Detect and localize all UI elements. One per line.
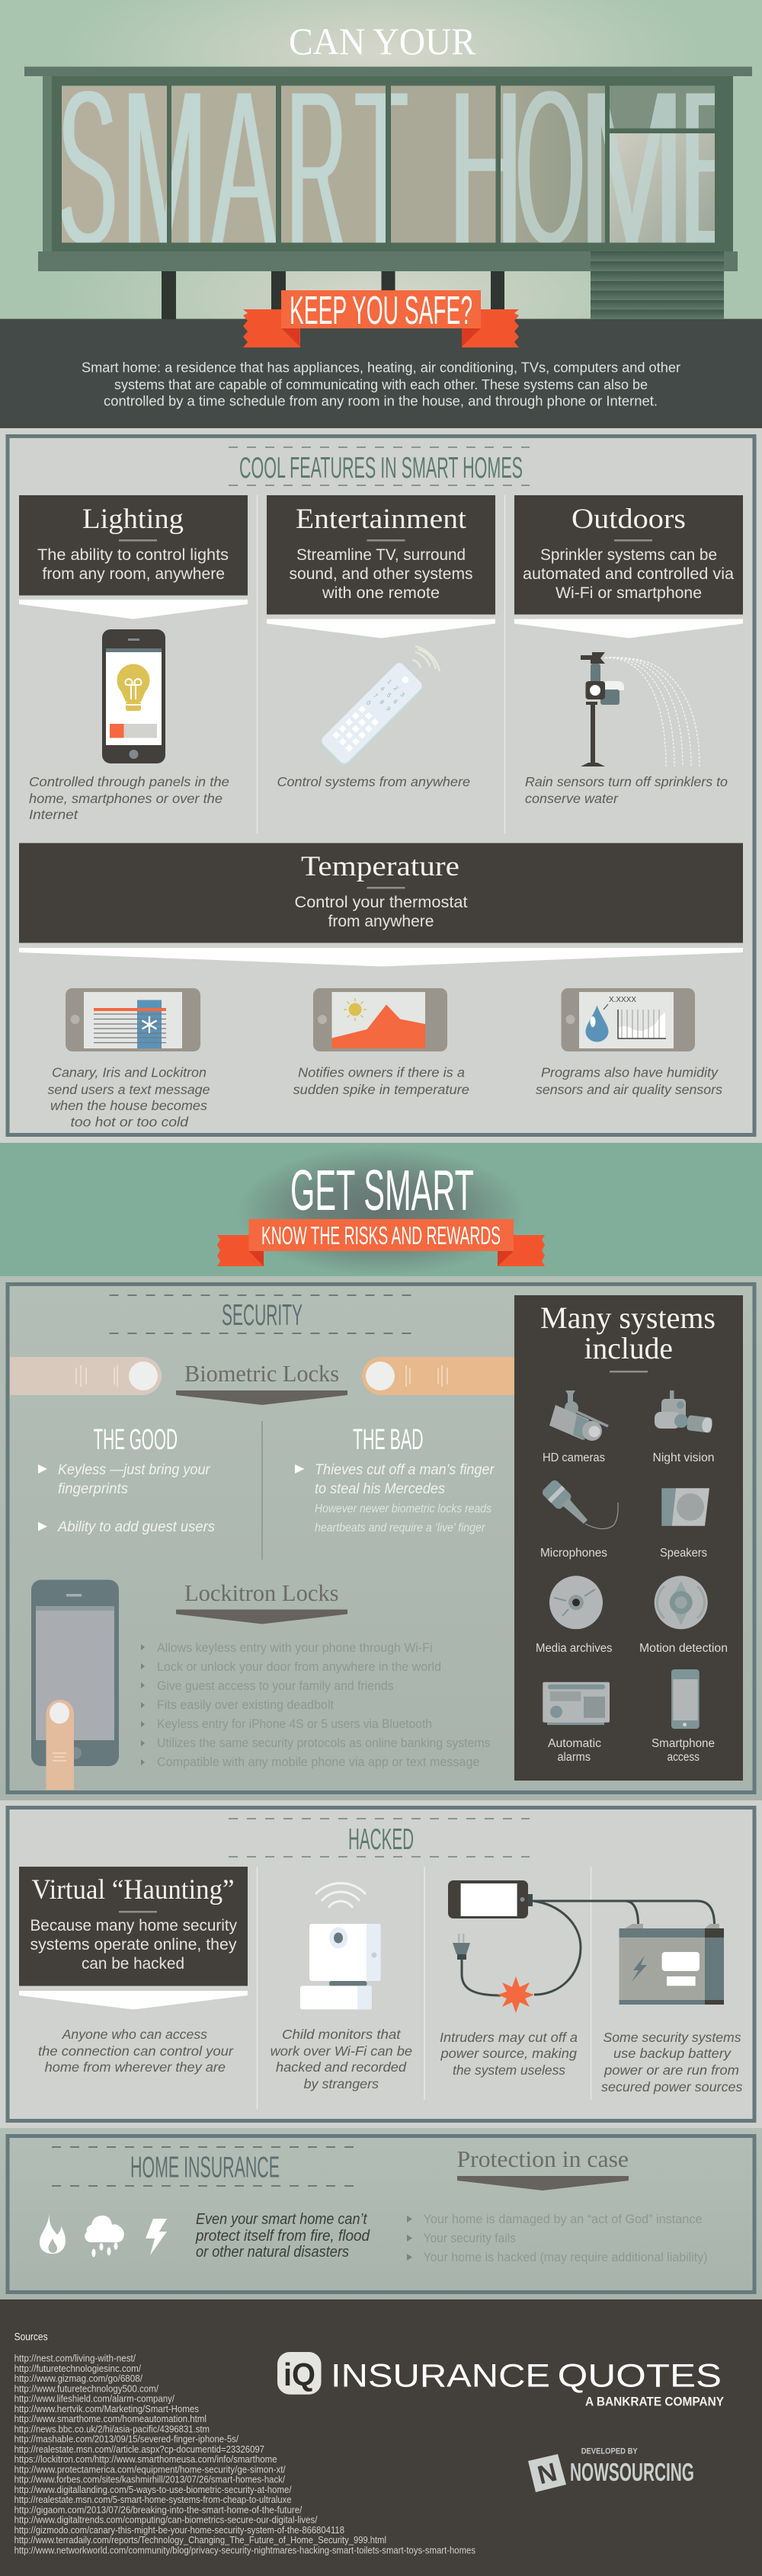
- logo: nowsourcing: DEVELOPED BY: [581, 2447, 638, 2456]
- captions: hacked: home from wherever they are: [45, 2059, 226, 2075]
- footer: [0, 2299, 762, 2576]
- title: smart home in the windows: E: [680, 43, 747, 293]
- icon: remote control: 8: [378, 699, 386, 706]
- label: motion detection: Motion detection: [639, 1642, 728, 1655]
- captions: top row: Rain sensors turn off sprinklers to: [525, 774, 728, 789]
- card: entertainment: Entertainment: [296, 504, 467, 535]
- captions: temperature row: Notifies owners if there is a: [298, 1065, 465, 1080]
- logo: insurance quotes: INSURANCE: [331, 2359, 550, 2395]
- captions: temperature row: [47, 1065, 722, 1129]
- label: smartphone access: [652, 1737, 715, 1764]
- icon: alarm panel: [543, 1682, 610, 1725]
- title: smart home in the windows: A: [212, 43, 276, 294]
- column: the good: Keyless —just bring your: [58, 1462, 210, 1478]
- sources list: http://www.protectamerica.com/equipment/home-security/ge-simon-xt/: [14, 2464, 286, 2475]
- icon: phone with light bulb: [102, 629, 165, 763]
- logo: nowsourcing: [528, 2447, 694, 2492]
- panel: security: [0, 1276, 762, 1800]
- icon: night vision camera: [655, 1390, 713, 1433]
- sources list: http://www.futuretechnology500.com/: [14, 2383, 158, 2394]
- captions: top row: Controlled through panels in the: [29, 774, 229, 789]
- label: smartphone access: access: [668, 1751, 700, 1764]
- captions: hacked: hacked and recorded: [276, 2059, 407, 2075]
- card: entertainment: Streamline TV, surround: [296, 546, 466, 564]
- icon: child monitor: [300, 1883, 380, 2009]
- captions: top row: Internet: [29, 807, 78, 822]
- icon: phone with temperature spike: [313, 988, 447, 1051]
- captions: hacked: secured power sources: [601, 2079, 743, 2094]
- icon: flame: [40, 2213, 66, 2254]
- list: lockitron features: Fits easily over existing deadbolt: [157, 1698, 334, 1712]
- list: lockitron features: Give guest access to your family and friends: [157, 1678, 394, 1693]
- heading: biometric locks: Biometric Locks: [184, 1360, 339, 1387]
- text: natural disasters: Even your smart home can’t: [196, 2211, 368, 2228]
- card: outdoors: Outdoors: [572, 504, 686, 535]
- card: virtual haunting: Virtual “Haunting”: [32, 1874, 235, 1906]
- captions: hacked: Child monitors that: [282, 2027, 402, 2042]
- sources list: http://realestate.msn.com//article.aspx?cp-documentid=23326097: [14, 2444, 264, 2455]
- heading: home insurance: HOME INSURANCE: [130, 2152, 280, 2184]
- icon: remote control: 6: [392, 698, 399, 706]
- heading: security: SECURITY: [222, 1299, 303, 1332]
- label: hd cameras: HD cameras: [543, 1451, 605, 1464]
- icon: media disc: [549, 1576, 603, 1629]
- heading: protection in case: [457, 2146, 629, 2190]
- card: entertainment: sound, and other systems: [290, 565, 472, 583]
- card: outdoors: automated and controlled via: [523, 565, 734, 583]
- icon: cut wire spark: [498, 1976, 534, 2013]
- captions: hacked: Intruders may cut off a: [440, 2030, 578, 2045]
- sources list: http://realestate.msn.com/5-smart-home-systems-from-cheap-to-ultraluxe: [14, 2494, 292, 2505]
- panel: many systems include: [514, 1295, 743, 1781]
- captions: hacked: Some security systems: [604, 2030, 741, 2045]
- text: natural disasters: or other natural disasters: [196, 2244, 349, 2261]
- captions: hacked: Anyone who can access: [62, 2027, 207, 2042]
- icon: left finger: [10, 1357, 162, 1395]
- title: smart home in the windows: R: [287, 43, 346, 294]
- logo: nowsourcing: NOWSOURCING: [570, 2458, 694, 2486]
- captions: temperature row: send users a text message: [47, 1082, 210, 1097]
- section: header scene: [0, 0, 762, 428]
- icon: motion detector: [655, 1576, 708, 1629]
- text: natural disasters: protect itself from fire, flood: [195, 2228, 370, 2245]
- captions: top row: home, smartphones or over the: [29, 791, 223, 806]
- icon: phone wired to plug and battery: [448, 1880, 715, 2013]
- sources list: http://gizmodo.com/canary-this-might-be-your-home-security-system-of-the-866804118: [14, 2525, 344, 2536]
- captions: temperature row: sudden spike in temperature: [293, 1082, 469, 1097]
- ribbon: know the risks and rewards: [217, 1219, 545, 1266]
- icon: lightning bolt: [146, 2219, 167, 2255]
- text: natural disasters: [195, 2211, 370, 2261]
- list: lockitron features: Compatible with any mobile phone via app or text message: [157, 1755, 480, 1769]
- logo: insurance quotes: A BANKRATE COMPANY: [585, 2394, 725, 2408]
- title: smart home in the windows: M: [122, 43, 207, 293]
- heading: hacked: HACKED: [348, 1823, 414, 1856]
- label: automatic alarms: [548, 1737, 601, 1764]
- heading: protection in case: Protection in case: [457, 2146, 629, 2172]
- captions: temperature row: too hot or too cold: [70, 1114, 189, 1129]
- icon: right finger: [362, 1357, 514, 1395]
- icon: phone with humidity chart: X.XXXX: [609, 996, 636, 1004]
- ribbon: keep you safe: KEEP YOU SAFE?: [290, 289, 472, 333]
- card: temperature: [19, 843, 743, 966]
- card: temperature: from anywhere: [328, 913, 434, 930]
- panel: many systems include: include: [584, 1331, 673, 1365]
- intro text: controlled by a time schedule from any room in the house, and through phone or Internet.: [104, 393, 658, 408]
- column: the bad: THE BAD: [353, 1424, 424, 1456]
- card: outdoors: [514, 495, 743, 638]
- captions: hacked: use backup battery: [613, 2046, 732, 2061]
- sources list: [14, 2330, 475, 2555]
- sources list: https://lockitron.com/http://www.smarthomeusa.com/info/smarthome: [14, 2454, 277, 2465]
- heading: cool features: COOL FEATURES IN SMART HOMES: [239, 452, 523, 485]
- title: smart home in the windows: H: [450, 43, 523, 293]
- captions: top row: Control systems from anywhere: [277, 774, 470, 789]
- icon: remote control: 9: [385, 705, 392, 712]
- icon: backup battery: [619, 1924, 724, 2005]
- captions: temperature row: sensors and air quality sensors: [536, 1082, 722, 1097]
- illustration: house: [24, 42, 752, 319]
- panel: many systems include: Many systems: [540, 1301, 716, 1335]
- column: the bad: [295, 1424, 495, 1534]
- list: lockitron features: [141, 1640, 491, 1769]
- card: lighting: [19, 495, 248, 619]
- card: virtual haunting: [19, 1867, 248, 2010]
- captions: hacked: the system useless: [453, 2062, 565, 2078]
- list: lockitron features: Allows keyless entry with your phone through Wi-Fi: [157, 1640, 433, 1655]
- sources list: http://www.gizmag.com/go/6808/: [14, 2373, 142, 2384]
- sources list: http://www.networkworld.com/community/blog/privacy-security-nightmares-hacking-smart-toilets-smart-toys-smart-homes: [14, 2545, 475, 2555]
- sources list: http://www.smarthome.com/homeautomation.html: [14, 2414, 207, 2424]
- logo: insurance quotes: [277, 2352, 725, 2408]
- card: virtual haunting: Because many home security: [30, 1917, 237, 1934]
- sources list: http://www.terradaily.com/reports/Technology_Changing_The_Future_of_Home_Security_999.html: [14, 2535, 386, 2546]
- icon: phone with humidity chart: [561, 988, 695, 1051]
- column: the good: THE GOOD: [93, 1424, 178, 1456]
- intro text: [82, 360, 680, 408]
- label: smartphone access: Smartphone: [652, 1737, 715, 1750]
- column: the good: [38, 1424, 215, 1535]
- icon: smartphone: [671, 1669, 700, 1729]
- captions: hacked: power source, making: [440, 2046, 577, 2061]
- title: can your: CAN YOUR: [289, 20, 476, 62]
- sources list: http://www.digitallanding.com/5-ways-to-use-biometric-security-at-home/: [14, 2485, 292, 2495]
- icon: remote control: 4: [379, 685, 386, 693]
- logo: insurance quotes: QUOTES: [558, 2359, 722, 2395]
- sources list: http://www.forbes.com/sites/kashmirhill/2013/07/26/smart-homes-hack/: [14, 2475, 285, 2485]
- captions: hacked: the connection can control your: [38, 2043, 234, 2059]
- list: protection cases: Your security fails: [424, 2231, 516, 2245]
- column: the bad: However newer biometric locks reads: [315, 1502, 491, 1515]
- banner: get smart: [0, 1143, 762, 1276]
- label: microphones: Microphones: [540, 1547, 607, 1560]
- sources list: Sources: [14, 2330, 48, 2342]
- icon: plug: [453, 1934, 470, 1960]
- sources list: http://www.digitaltrends.com/computing/can-biometrics-secure-our-digital-lives/: [14, 2515, 318, 2526]
- card: lighting: The ability to control lights: [37, 546, 229, 564]
- card: temperature: Temperature: [301, 851, 459, 882]
- title: smart home in the windows: M: [579, 42, 684, 293]
- list: protection cases: Your home is damaged by an “act of God” instance: [424, 2212, 703, 2226]
- sources list: http://www.hertvik.com/Marketing/Smart-Homes: [14, 2404, 199, 2414]
- label: automatic alarms: alarms: [558, 1751, 591, 1764]
- sources list: http://news.bbc.co.uk/2/hi/asia-pacific/4396831.stm: [14, 2424, 210, 2435]
- card: lighting: Lighting: [82, 504, 184, 535]
- column: the bad: Thieves cut off a man’s finger: [315, 1462, 495, 1478]
- icon: rain cloud: [85, 2216, 124, 2257]
- icon: sprinkler: [581, 652, 700, 766]
- sources list: http://mashable.com/2013/09/15/severed-finger-iphone-5s/: [14, 2434, 239, 2445]
- captions: top row: [29, 774, 728, 822]
- captions: temperature row: Canary, Iris and Lockitron: [52, 1065, 207, 1080]
- sources list: http://gigaom.com/2013/07/26/breaking-into-the-smart-home-of-the-future/: [14, 2505, 303, 2516]
- card: outdoors: Sprinkler systems can be: [540, 546, 717, 564]
- icon: phone with thermostat list: [66, 988, 200, 1051]
- panel: cool features: [0, 428, 762, 1143]
- column: the good: Ability to add guest users: [57, 1519, 215, 1535]
- heading: lockitron locks: Lockitron Locks: [184, 1579, 338, 1606]
- column: the bad: to steal his Mercedes: [315, 1481, 445, 1497]
- captions: temperature row: Programs also have humidity: [541, 1065, 719, 1080]
- list: lockitron features: Keyless entry for iPhone 4S or 5 users via Bluetooth: [157, 1717, 432, 1731]
- card: lighting: from any room, anywhere: [43, 565, 225, 583]
- logo: nowsourcing: N: [535, 2458, 560, 2490]
- label: speakers: Speakers: [660, 1547, 707, 1560]
- title: smart home in the windows: T: [355, 43, 408, 293]
- sources list: http://futuretechnologiesinc.com/: [14, 2363, 141, 2374]
- column: the bad: heartbeats and require a ‘live’ finger: [315, 1522, 485, 1534]
- card: entertainment: [267, 495, 495, 638]
- label: automatic alarms: Automatic: [548, 1737, 601, 1750]
- icon: remote control: 0: [365, 699, 373, 707]
- captions: hacked: [38, 2027, 743, 2094]
- column: the good: fingerprints: [58, 1481, 128, 1497]
- logo: insurance quotes: iQ: [283, 2357, 315, 2392]
- card: virtual haunting: systems operate online, they: [30, 1936, 237, 1954]
- captions: top row: conserve water: [525, 791, 619, 806]
- panel: hacked: [0, 1800, 762, 2128]
- heading: lockitron locks: [176, 1579, 347, 1624]
- captions: temperature row: when the house becomes: [50, 1098, 207, 1113]
- label: night vision: Night vision: [652, 1451, 715, 1464]
- ribbon: keep you safe: [243, 289, 519, 347]
- icon: remote control: 7: [372, 692, 379, 699]
- list: lockitron features: Utilizes the same security protocols as online banking systems: [157, 1736, 491, 1750]
- captions: hacked: power or are run from: [604, 2062, 739, 2078]
- sources list: http://www.lifeshield.com/alarm-company/: [14, 2394, 174, 2405]
- icon: phone with finger: [31, 1580, 119, 1790]
- icon: remote control: 1: [386, 678, 393, 686]
- label: media archives: Media archives: [536, 1642, 613, 1655]
- card: entertainment: with one remote: [322, 584, 440, 602]
- title: smart home in the windows: [62, 91, 715, 242]
- icon: remote control: 2: [392, 685, 400, 692]
- card: temperature: Control your thermostat: [294, 894, 468, 911]
- title: get smart: GET SMART: [290, 1158, 474, 1222]
- heading: biometric locks: [176, 1360, 347, 1405]
- list: protection cases: [407, 2212, 707, 2264]
- panel: home insurance: [0, 2128, 762, 2299]
- card: virtual haunting: can be hacked: [82, 1955, 184, 1973]
- list: lockitron features: Lock or unlock your door from anywhere in the world: [157, 1659, 441, 1674]
- captions: hacked: work over Wi-Fi can be: [271, 2043, 412, 2059]
- icon: hd camera: [549, 1390, 608, 1441]
- icon: microphone: [540, 1478, 618, 1529]
- icon: remote control: 5: [386, 692, 393, 699]
- sources list: http://nest.com/living-with-nest/: [14, 2354, 136, 2364]
- card: outdoors: Wi-Fi or smartphone: [555, 584, 702, 602]
- title: smart home in the windows: O: [515, 42, 585, 293]
- title: smart home in the windows: S: [58, 42, 117, 293]
- icon: remote control: 3: [399, 691, 406, 699]
- captions: hacked: by strangers: [304, 2076, 379, 2091]
- intro text: Smart home: a residence that has appliances, heating, air conditioning, TVs, computers and other: [82, 360, 680, 375]
- icon: speaker: [661, 1488, 709, 1526]
- intro text: systems that are capable of communicating with each other. These systems can also be: [114, 376, 648, 392]
- ribbon: know the risks and rewards: KNOW THE RISKS AND REWARDS: [261, 1221, 501, 1250]
- icon: remote control: [319, 646, 440, 767]
- list: protection cases: Your home is hacked (may require additional liability): [424, 2250, 707, 2264]
